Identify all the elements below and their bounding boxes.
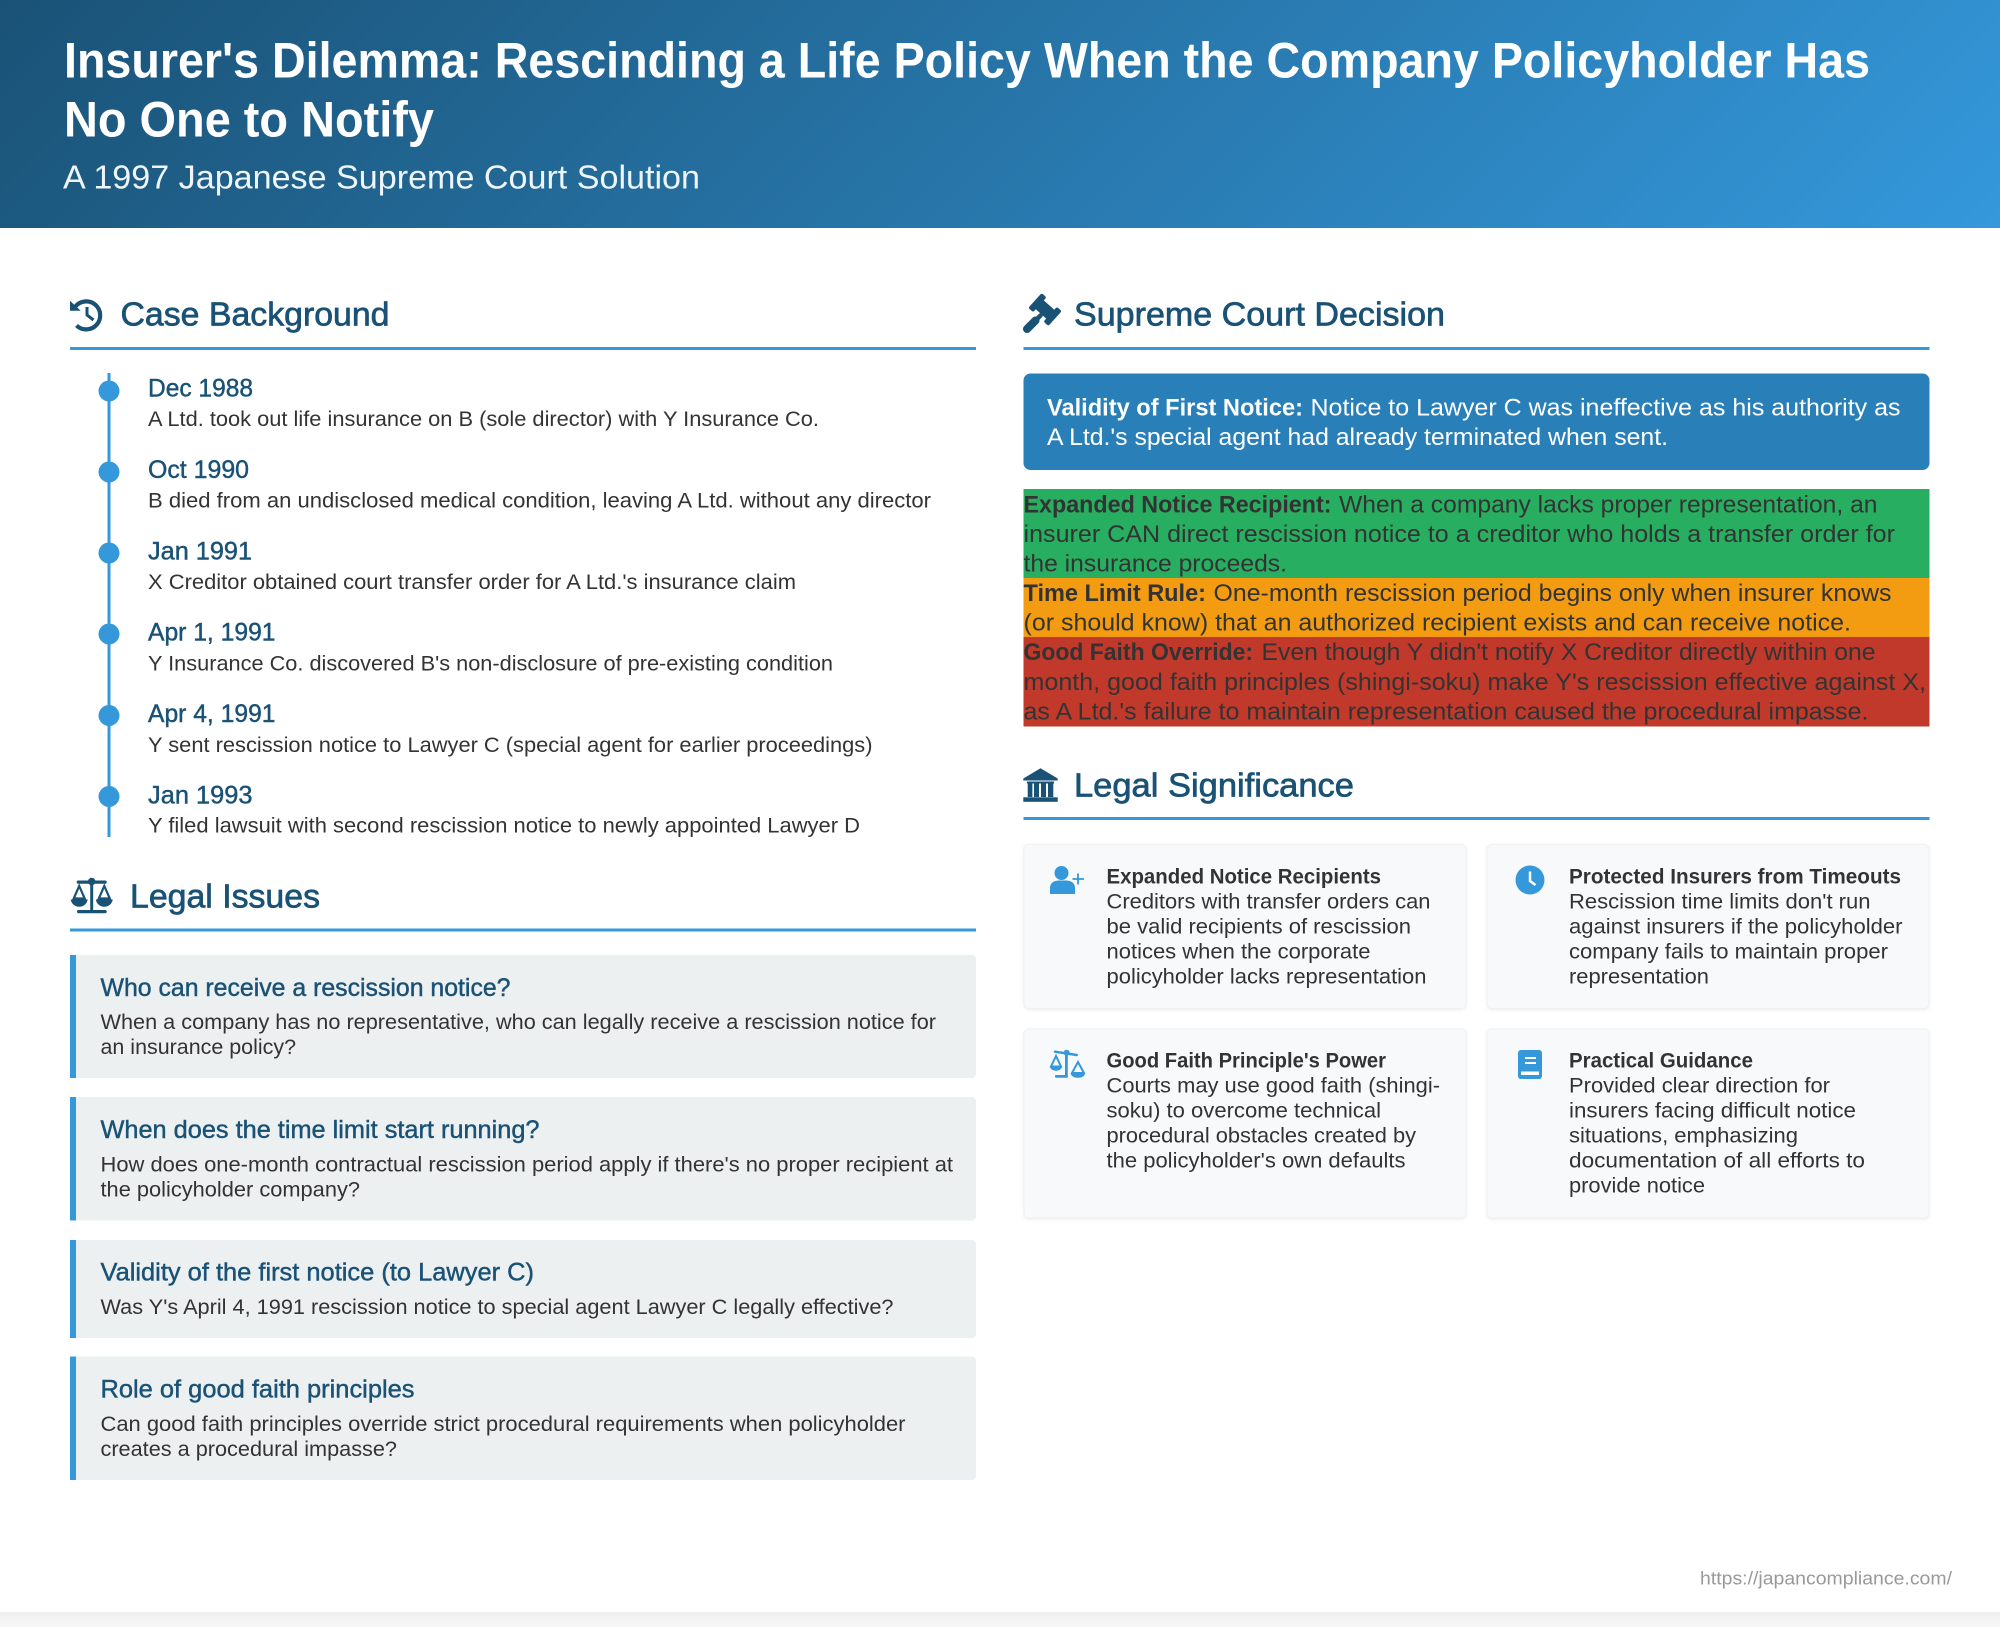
card: protected insurers: against insurers if the policyholder	[1569, 915, 1902, 938]
event: Apr 1, 1991: Apr 1, 1991	[148, 618, 276, 646]
card: good faith power: Courts may use good faith (shingi-	[1106, 1074, 1440, 1097]
finding: time limit rule: One-month rescission period begins only when insurer knows	[1214, 580, 1892, 607]
event: Dec 1988	[98, 374, 819, 431]
issue card: first notice validity: Was Y's April 4, 1991 rescission notice to special agent Lawyer C legally effective?	[100, 1296, 894, 1319]
card: practical guidance: provide notice	[1569, 1174, 1705, 1197]
callout: validity of first notice: Validity of First Notice:	[1047, 394, 1303, 421]
card: protected insurers: Protected Insurers from Timeouts	[1569, 865, 1901, 888]
event: Jan 1991	[98, 537, 796, 594]
issue card: time limit: the policyholder company?	[100, 1178, 360, 1201]
issue card: who can receive: Who can receive a rescission notice?	[100, 974, 510, 1002]
card: protected insurers: Rescission time limits don't run	[1569, 890, 1870, 913]
issue card: time limit: How does one-month contractual rescission period apply if there's no proper recipient at	[100, 1153, 953, 1176]
card: good faith power: procedural obstacles created by	[1106, 1124, 1417, 1147]
event: Jan 1993: Y filed lawsuit with second rescission notice to newly appointed Lawyer D	[148, 814, 860, 837]
title: No One to Notify	[64, 91, 434, 147]
issue card: who can receive: When a company has no representative, who can legally receive a rescission notice for	[100, 1011, 936, 1034]
card: expanded notice recipients	[1024, 844, 1466, 1008]
finding: expanded notice recipient: Expanded Notice Recipient:	[1024, 491, 1332, 518]
card: good faith power: soku) to overcome technical	[1106, 1099, 1381, 1122]
icon: courthouse	[1023, 768, 1058, 802]
issue card: good faith role: creates a procedural impasse?	[100, 1438, 397, 1461]
issue card: first notice validity	[70, 1240, 976, 1338]
event: Apr 4, 1991	[98, 700, 872, 757]
finding: expanded notice recipient: insurer CAN direct rescission notice to a creditor who holds a transfer order for	[1024, 521, 1895, 548]
footer strip	[0, 1612, 2000, 1627]
panel: legal issues	[70, 878, 976, 1480]
issue card: time limit: When does the time limit start running?	[100, 1116, 540, 1144]
card: good faith power: the policyholder's own defaults	[1106, 1149, 1406, 1172]
icon: user plus	[1050, 866, 1084, 894]
heading: supreme court decision: Supreme Court Decision	[1074, 296, 1445, 333]
event: Oct 1990: Oct 1990	[148, 456, 249, 484]
finding: good faith override	[1024, 637, 1930, 726]
card: practical guidance: documentation of all efforts to	[1569, 1149, 1865, 1172]
card: practical guidance: Provided clear direction for	[1569, 1074, 1830, 1097]
title: Insurer's Dilemma: Rescinding a Life Policy When the Company Policyholder Has	[64, 32, 1870, 88]
card: practical guidance: situations, emphasizing	[1569, 1124, 1798, 1147]
card: practical guidance: Practical Guidance	[1569, 1049, 1753, 1072]
event: Dec 1988: Dec 1988	[148, 374, 253, 402]
finding: expanded notice recipient	[1024, 489, 1930, 578]
card: protected insurers: company fails to maintain proper	[1569, 940, 1888, 963]
event: Oct 1990: B died from an undisclosed medical condition, leaving A Ltd. without any director	[148, 489, 931, 512]
event: Jan 1991: X Creditor obtained court transfer order for A Ltd.'s insurance claim	[148, 571, 796, 594]
icon: balance scale	[71, 878, 113, 913]
issue card: good faith role: Role of good faith principles	[100, 1375, 414, 1403]
header banner	[0, 0, 2000, 228]
card: expanded notice recipients: notices when the corporate	[1106, 940, 1370, 963]
footer url: https://japancompliance.com/	[1700, 1567, 1953, 1588]
issue card: first notice validity: Validity of the first notice (to Lawyer C)	[100, 1258, 534, 1286]
event: Dec 1988: A Ltd. took out life insurance on B (sole director) with Y Insurance Co.	[148, 408, 819, 431]
issue card: who can receive	[70, 955, 976, 1078]
event: Oct 1990	[98, 456, 931, 512]
event: Apr 1, 1991	[98, 618, 833, 675]
issue card: who can receive: an insurance policy?	[100, 1036, 296, 1059]
finding: good faith override: as A Ltd.'s failure to maintain representation caused the procedural impasse.	[1024, 698, 1868, 725]
card: expanded notice recipients: Expanded Notice Recipients	[1106, 865, 1381, 888]
card: practical guidance	[1487, 1029, 1929, 1218]
event: Apr 4, 1991: Y sent rescission notice to Lawyer C (special agent for earlier proceedings)	[148, 734, 872, 757]
issue card: good faith role	[70, 1356, 976, 1480]
panel: case background	[70, 296, 976, 837]
heading: legal issues: Legal Issues	[130, 878, 320, 915]
event: Jan 1991: Jan 1991	[148, 537, 252, 565]
timeline	[98, 373, 931, 837]
issue card: time limit	[70, 1097, 976, 1220]
icon: history clock	[70, 301, 100, 329]
heading: case background: Case Background	[120, 296, 390, 333]
card: expanded notice recipients: be valid recipients of rescission	[1106, 915, 1411, 938]
panel: supreme court decision	[1024, 293, 1930, 726]
icon: book	[1518, 1050, 1542, 1079]
event: Apr 4, 1991: Apr 4, 1991	[148, 700, 276, 728]
finding: expanded notice recipient: the insurance proceeds.	[1024, 550, 1287, 577]
icon: gavel	[1027, 293, 1062, 329]
event: Jan 1993: Jan 1993	[148, 781, 252, 809]
card: good faith power: Good Faith Principle's Power	[1106, 1049, 1386, 1072]
subtitle: A 1997 Japanese Supreme Court Solution	[63, 158, 700, 195]
event: Apr 1, 1991: Y Insurance Co. discovered B's non-disclosure of pre-existing condition	[148, 652, 833, 675]
icon: tilted scale	[1050, 1050, 1085, 1078]
title	[64, 32, 1870, 147]
finding: expanded notice recipient: When a company lacks proper representation, an	[1339, 491, 1878, 518]
card: practical guidance: insurers facing difficult notice	[1569, 1099, 1856, 1122]
callout: validity of first notice: Notice to Lawyer C was ineffective as his authority as	[1310, 394, 1900, 421]
card: expanded notice recipients: policyholder lacks representation	[1106, 965, 1426, 988]
issue card: good faith role: Can good faith principles override strict procedural requirements when policyholder	[100, 1413, 906, 1436]
finding: good faith override: Even though Y didn't notify X Creditor directly within one	[1262, 639, 1876, 666]
finding: time limit rule	[1024, 578, 1930, 637]
heading: legal significance: Legal Significance	[1074, 767, 1354, 804]
finding: time limit rule: Time Limit Rule:	[1024, 580, 1206, 607]
event: Jan 1993	[98, 781, 860, 837]
card: protected insurers: representation	[1569, 965, 1709, 988]
finding: good faith override: month, good faith principles (shingi-soku) make Y's rescission effective against X,	[1024, 669, 1926, 696]
card: expanded notice recipients: Creditors with transfer orders can	[1106, 890, 1430, 913]
icon: clock	[1516, 866, 1544, 894]
finding: good faith override: Good Faith Override:	[1024, 639, 1253, 666]
card: protected insurers	[1487, 844, 1929, 1008]
callout: validity of first notice	[1024, 374, 1930, 470]
card: good faith power	[1024, 1029, 1466, 1218]
finding: time limit rule: (or should know) that an authorized recipient exists and can receive notice.	[1024, 609, 1851, 636]
panel: legal significance	[1023, 767, 1930, 1218]
callout: validity of first notice: A Ltd.'s special agent had already terminated when sent.	[1047, 424, 1668, 451]
